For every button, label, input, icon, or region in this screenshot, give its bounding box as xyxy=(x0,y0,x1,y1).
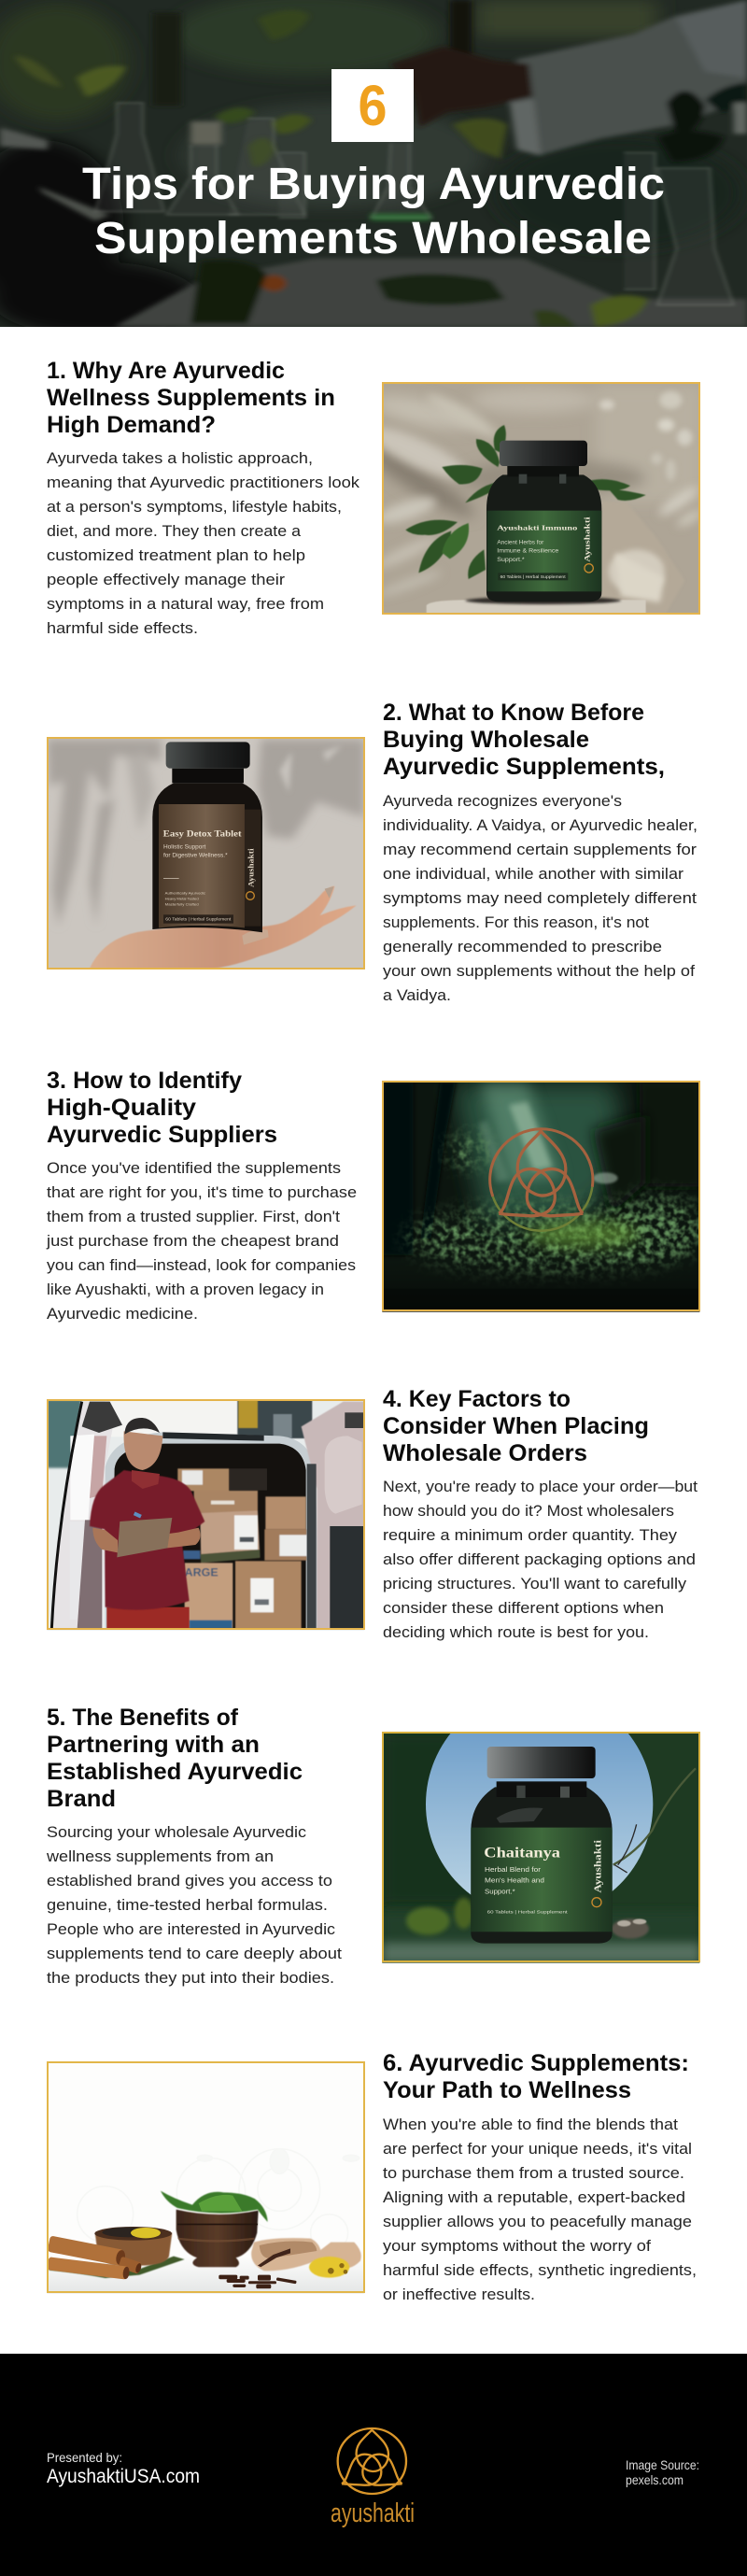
body text 1: at a person's symptoms, lifestyle habits, xyxy=(47,498,342,516)
photo: Chaitanya bottle against sky circle: Herbal Blend for xyxy=(485,1865,542,1874)
body text 4: also offer different packaging options and xyxy=(383,1550,696,1568)
body text 3: Once you've identified the supplements xyxy=(47,1159,341,1177)
photo: Ayushakti Immuno bottle with leaves: Ayushakti xyxy=(583,517,592,562)
panel: section 6 xyxy=(43,2050,697,2303)
number badge xyxy=(331,69,414,142)
heading 2: 2. What to Know Before xyxy=(383,700,644,726)
body text 2: generally recommended to prescribe xyxy=(383,938,662,955)
heading 4: Wholesale Orders xyxy=(383,1440,587,1466)
photo: delivery man with clipboard and van of boxes: ARGE xyxy=(185,1565,218,1578)
photo: Chaitanya bottle against sky circle: Ayushakti xyxy=(593,1840,603,1893)
body text 2: symptoms may need completely different xyxy=(383,889,697,907)
body text 1: meaning that Ayurvedic practitioners look xyxy=(47,474,360,491)
photo: Easy Detox Tablet bottle on hand: Easy Detox Tablet xyxy=(163,830,243,840)
heading 1: High Demand? xyxy=(47,412,216,438)
body text 4 xyxy=(383,1478,698,1641)
body text 3 xyxy=(46,1159,357,1323)
body text 2 xyxy=(383,792,698,1004)
title: Supplements Wholesale xyxy=(94,214,652,263)
photo: Ayushakti Immuno bottle with leaves: Ayushakti Immuno xyxy=(497,524,578,532)
photo: Easy Detox Tablet bottle on hand: Masterfully Crafted xyxy=(165,902,199,906)
photo: Easy Detox Tablet bottle on hand: Authentically Ayurvedic xyxy=(165,892,205,896)
body text 3: like Ayushakti, with a proven legacy in xyxy=(47,1281,324,1298)
body text 2: may recommend certain supplements for xyxy=(383,841,697,858)
body text 2: supplements. For this reason, it's not xyxy=(383,913,649,931)
heading 1 xyxy=(47,358,335,438)
logo: Ayushakti emblem and wordmark xyxy=(331,2428,415,2528)
heading 5: Partnering with an xyxy=(47,1732,260,1758)
panel: section 3 xyxy=(46,1068,705,1323)
heading 5: Brand xyxy=(47,1786,116,1812)
photo: Chaitanya bottle against sky circle: Support.* xyxy=(485,1888,515,1896)
heading 5 xyxy=(47,1705,303,1812)
body text 4: pricing structures. You'll want to carefully xyxy=(383,1575,687,1592)
presented by: Presented by: xyxy=(47,2450,122,2465)
heading 3: Ayurvedic Suppliers xyxy=(47,1122,277,1148)
body text 4: how should you do it? Most wholesalers xyxy=(383,1502,674,1520)
photo: Ayushakti Immuno bottle with leaves: Immune & Resilience xyxy=(497,548,559,555)
heading 6 xyxy=(383,2050,689,2103)
photo: Easy Detox Tablet bottle on hand xyxy=(43,733,368,971)
photo: Easy Detox Tablet bottle on hand: Heavy Metal Tested xyxy=(165,898,199,901)
photo: delivery man with clipboard and van of boxes xyxy=(43,1395,368,1634)
body text 4: require a minimum order quantity. They xyxy=(383,1526,678,1544)
photo: Ayushakti Immuno bottle with leaves: 60 Tablets | Herbal Supplement xyxy=(500,574,567,579)
panel: footer xyxy=(0,2354,747,2576)
body text 3: you can find—instead, look for companies xyxy=(47,1256,356,1274)
photo: Ayushakti Immuno bottle with leaves: Support.* xyxy=(497,557,525,563)
panel: section 1 xyxy=(47,358,704,637)
photo: Easy Detox Tablet bottle on hand: Ayushakti xyxy=(246,848,255,887)
heading 3: High-Quality xyxy=(47,1095,196,1121)
photo: Easy Detox Tablet bottle on hand: Holistic Support xyxy=(163,843,206,850)
heading 3 xyxy=(47,1068,277,1148)
body text 6: Aligning with a reputable, expert-backed xyxy=(383,2188,685,2206)
heading 2 xyxy=(383,700,665,780)
heading 6: 6. Ayurvedic Supplements: xyxy=(383,2050,689,2076)
body text 5: the products they put into their bodies. xyxy=(47,1969,334,1987)
photo: Ayushakti Immuno bottle with leaves: Ancient Herbs for xyxy=(497,539,544,545)
body text 6: to purchase them from a trusted source. xyxy=(383,2164,684,2182)
body text 2: your own supplements without the help of xyxy=(383,962,695,980)
heading 1: 1. Why Are Ayurvedic xyxy=(47,358,285,384)
heading 1: Wellness Supplements in xyxy=(47,385,335,411)
heading 2: Buying Wholesale xyxy=(383,727,589,753)
body text 3: that are right for you, it's time to purchase xyxy=(47,1183,357,1201)
photo: Easy Detox Tablet bottle on hand: for Digestive Wellness.* xyxy=(163,853,228,859)
heading 6: Your Path to Wellness xyxy=(383,2077,631,2103)
panel: section 4 xyxy=(43,1386,698,1641)
body text 3: Ayurvedic medicine. xyxy=(47,1305,198,1323)
panel: section 2 xyxy=(43,700,698,1004)
body text 5 xyxy=(46,1823,342,1987)
body text 1: people effectively manage their xyxy=(47,571,285,588)
presented by: AyushaktiUSA.com xyxy=(47,2466,200,2487)
photo: Ayushakti Immuno bottle with leaves xyxy=(382,382,700,615)
photo: Chaitanya bottle against sky circle: Men's Health and xyxy=(485,1876,544,1885)
photo: Chaitanya bottle against sky circle xyxy=(382,1732,700,1963)
body text 6: or ineffective results. xyxy=(383,2286,535,2303)
photo: Easy Detox Tablet bottle on hand: 60 Tablets | Herbal Supplement xyxy=(165,916,232,921)
body text 4: Next, you're ready to place your order—but xyxy=(383,1478,698,1495)
heading 4: Consider When Placing xyxy=(383,1413,649,1439)
heading 5: Established Ayurvedic xyxy=(47,1759,303,1785)
photo: Chaitanya bottle against sky circle: Chaitanya xyxy=(484,1846,560,1861)
body text 2: Ayurveda recognizes everyone's xyxy=(383,792,622,810)
body text 2: one individual, while another with similar xyxy=(383,865,684,883)
body text 1 xyxy=(47,449,360,637)
body text 1: symptoms in a natural way, free from xyxy=(47,595,324,613)
body text 1: diet, and more. They then create a xyxy=(47,522,302,540)
body text 5: genuine, time-tested herbal formulas. xyxy=(47,1896,328,1914)
body text 6: your symptoms without the worry of xyxy=(383,2237,651,2255)
heading 4: 4. Key Factors to xyxy=(383,1386,571,1412)
body text 3: just purchase from the cheapest brand xyxy=(46,1232,339,1250)
body text 6: harmful side effects, synthetic ingredients, xyxy=(383,2261,697,2279)
number badge: 6 xyxy=(359,74,387,137)
heading 2: Ayurvedic Supplements, xyxy=(383,754,665,780)
body text 6: supplier allows you to peacefully manage xyxy=(383,2213,692,2230)
body text 6 xyxy=(383,2116,697,2303)
body text 1: Ayurveda takes a holistic approach, xyxy=(47,449,313,467)
image source credit: pexels.com xyxy=(626,2472,684,2487)
photo: herbs, spices and wooden bowls xyxy=(43,2059,368,2297)
body text 4: deciding which route is best for you. xyxy=(383,1623,649,1641)
body text 6: are perfect for your unique needs, it's vital xyxy=(383,2140,692,2158)
body text 5: wellness supplements from an xyxy=(46,1847,274,1865)
heading 5: 5. The Benefits of xyxy=(47,1705,239,1731)
body text 2: individuality. A Vaidya, or Ayurvedic healer, xyxy=(383,816,698,834)
body text 4: consider these different options when xyxy=(383,1599,664,1617)
panel: section 5 xyxy=(46,1691,703,1987)
photo: forest with triple-knot vine emblem xyxy=(378,1077,705,1315)
body text 5: People who are interested in Ayurvedic xyxy=(47,1920,336,1938)
image source credit: Image Source: xyxy=(626,2457,699,2472)
logo: Ayushakti emblem and wordmark: ayushakti xyxy=(331,2498,415,2528)
body text 1: customized treatment plan to help xyxy=(47,546,305,564)
body text 1: harmful side effects. xyxy=(47,619,198,637)
body text 3: them from a trusted supplier. First, don't xyxy=(47,1208,340,1225)
hero background photo: lab flasks and herbs, darkened xyxy=(0,0,747,336)
title xyxy=(82,160,665,263)
body text 6: When you're able to find the blends that xyxy=(383,2116,678,2133)
body text 2: a Vaidya. xyxy=(383,986,451,1004)
heading 4 xyxy=(383,1386,649,1466)
photo: Chaitanya bottle against sky circle: 60 Tablets | Herbal Supplement xyxy=(487,1909,568,1915)
body text 5: supplements tend to care deeply about xyxy=(47,1945,342,1962)
body text 5: established brand gives you access to xyxy=(47,1872,332,1890)
presented by xyxy=(47,2450,200,2487)
image source credit xyxy=(626,2457,699,2487)
title: Tips for Buying Ayurvedic xyxy=(82,160,665,209)
heading 3: 3. How to Identify xyxy=(47,1068,242,1094)
panel: hero banner xyxy=(0,0,747,336)
body text 5: Sourcing your wholesale Ayurvedic xyxy=(47,1823,307,1841)
